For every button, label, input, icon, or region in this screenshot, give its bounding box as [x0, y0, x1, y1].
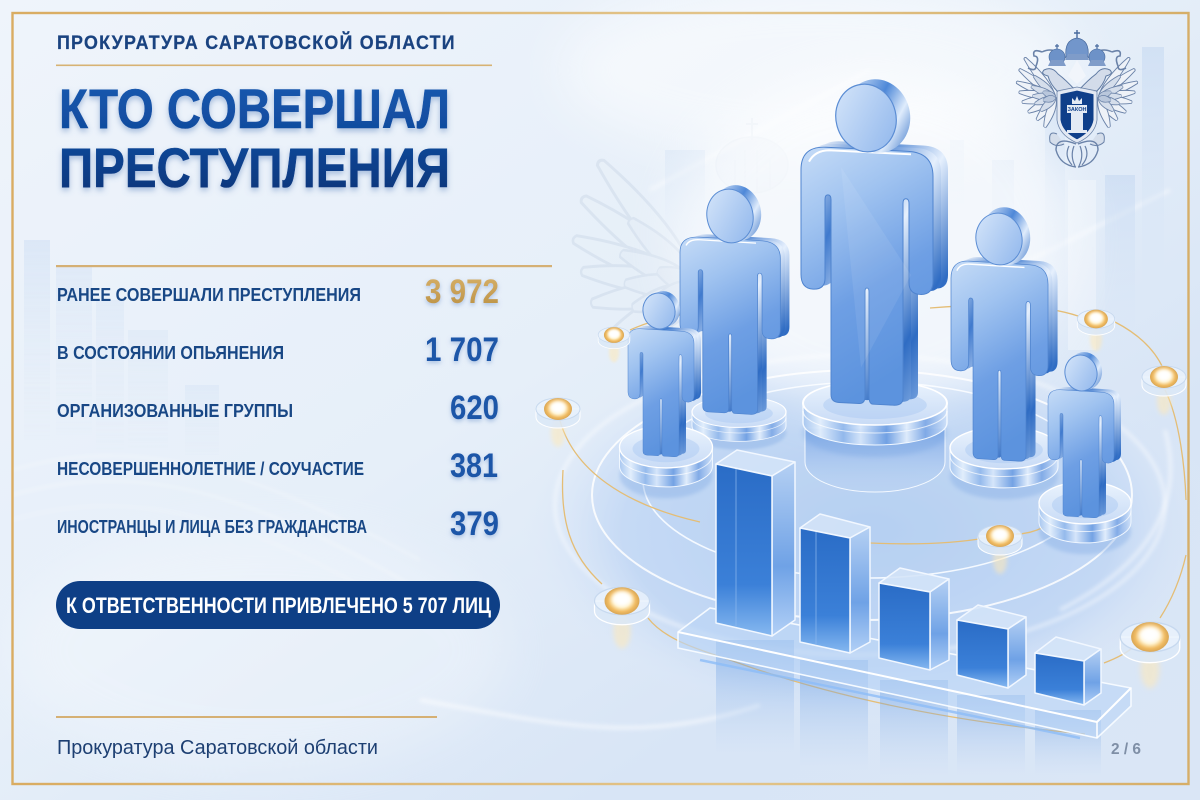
bar 3 — [879, 568, 949, 670]
left half of eagle — [1015, 44, 1076, 167]
footer caption: Прокуратура Саратовской области — [57, 737, 378, 759]
bar 1 — [716, 450, 795, 636]
total callout pill — [56, 581, 500, 629]
faded background chart right — [665, 47, 1164, 355]
glass platform — [678, 608, 1131, 738]
footer rule — [56, 716, 437, 718]
central crown — [1065, 30, 1089, 84]
title — [59, 78, 450, 199]
row: previously offended: 3 972 — [425, 273, 499, 311]
figure: left tall person — [680, 181, 789, 417]
title: КТО СОВЕРШАЛ — [59, 78, 450, 140]
stats rule — [56, 265, 552, 267]
title: ПРЕСТУПЛЕНИЯ — [59, 137, 450, 199]
organisation heading: ПРОКУРАТУРА САРАТОВСКОЙ ОБЛАСТИ — [57, 31, 455, 53]
stats list — [57, 273, 499, 543]
pedestal: small right — [1039, 482, 1131, 554]
faded background chart left — [12, 240, 420, 620]
row: minors: НЕСОВЕРШЕННОЛЕТНИЕ / СОУЧАСТИЕ — [57, 459, 364, 479]
row: organised groups — [57, 389, 499, 427]
figure: right tall person — [951, 203, 1058, 464]
figure: small left person — [628, 288, 701, 458]
row: foreigners — [57, 505, 499, 543]
heading rule — [56, 64, 492, 66]
floor rings — [420, 335, 1200, 728]
pedestal: left tall — [692, 397, 786, 450]
total callout pill: К ОТВЕТСТВЕННОСТИ ПРИВЛЕЧЕНО 5 707 ЛИЦ — [66, 593, 491, 618]
figure: small right person — [1048, 349, 1121, 519]
bar 4 — [957, 605, 1026, 688]
row: intoxicated: В СОСТОЯНИИ ОПЬЯНЕНИЯ — [57, 343, 284, 363]
right half of eagle — [1078, 44, 1139, 167]
shield caption: ЗАКОН — [1067, 107, 1087, 113]
row: foreigners: 379 — [450, 505, 499, 543]
pedestal: right tall — [950, 427, 1058, 499]
column in shield — [1067, 96, 1087, 133]
row: previously offended: РАНЕЕ СОВЕРШАЛИ ПРЕСТУПЛЕНИЯ — [57, 285, 361, 305]
page number: 2 / 6 — [1111, 741, 1141, 758]
bar chart — [716, 450, 1101, 705]
row: previously offended — [57, 273, 499, 311]
bar 2 — [800, 514, 870, 653]
row: organised groups: ОРГАНИЗОВАННЫЕ ГРУППЫ — [57, 401, 293, 421]
bar 5 — [1035, 637, 1101, 705]
row: foreigners: ИНОСТРАНЦЫ И ЛИЦА БЕЗ ГРАЖДАНСТВА — [57, 517, 367, 537]
white glow behind figures — [675, 70, 1075, 410]
shield outline — [1057, 87, 1097, 143]
row: intoxicated: 1 707 — [425, 331, 499, 369]
shield — [1059, 89, 1095, 141]
row: intoxicated — [57, 331, 499, 369]
glowing nodes — [536, 310, 1186, 688]
row: minors — [57, 447, 498, 485]
row: organised groups: 620 — [450, 389, 499, 427]
platform reflections — [716, 640, 1101, 775]
row: minors: 381 — [450, 447, 498, 485]
emblem of the prosecutor's office — [1015, 30, 1139, 167]
pedestal: centre — [803, 381, 947, 492]
faded emblem watermark — [569, 118, 788, 388]
figure: big centre person — [801, 72, 948, 408]
pedestal: small left — [620, 426, 712, 498]
gold connecting lines — [559, 305, 1186, 734]
